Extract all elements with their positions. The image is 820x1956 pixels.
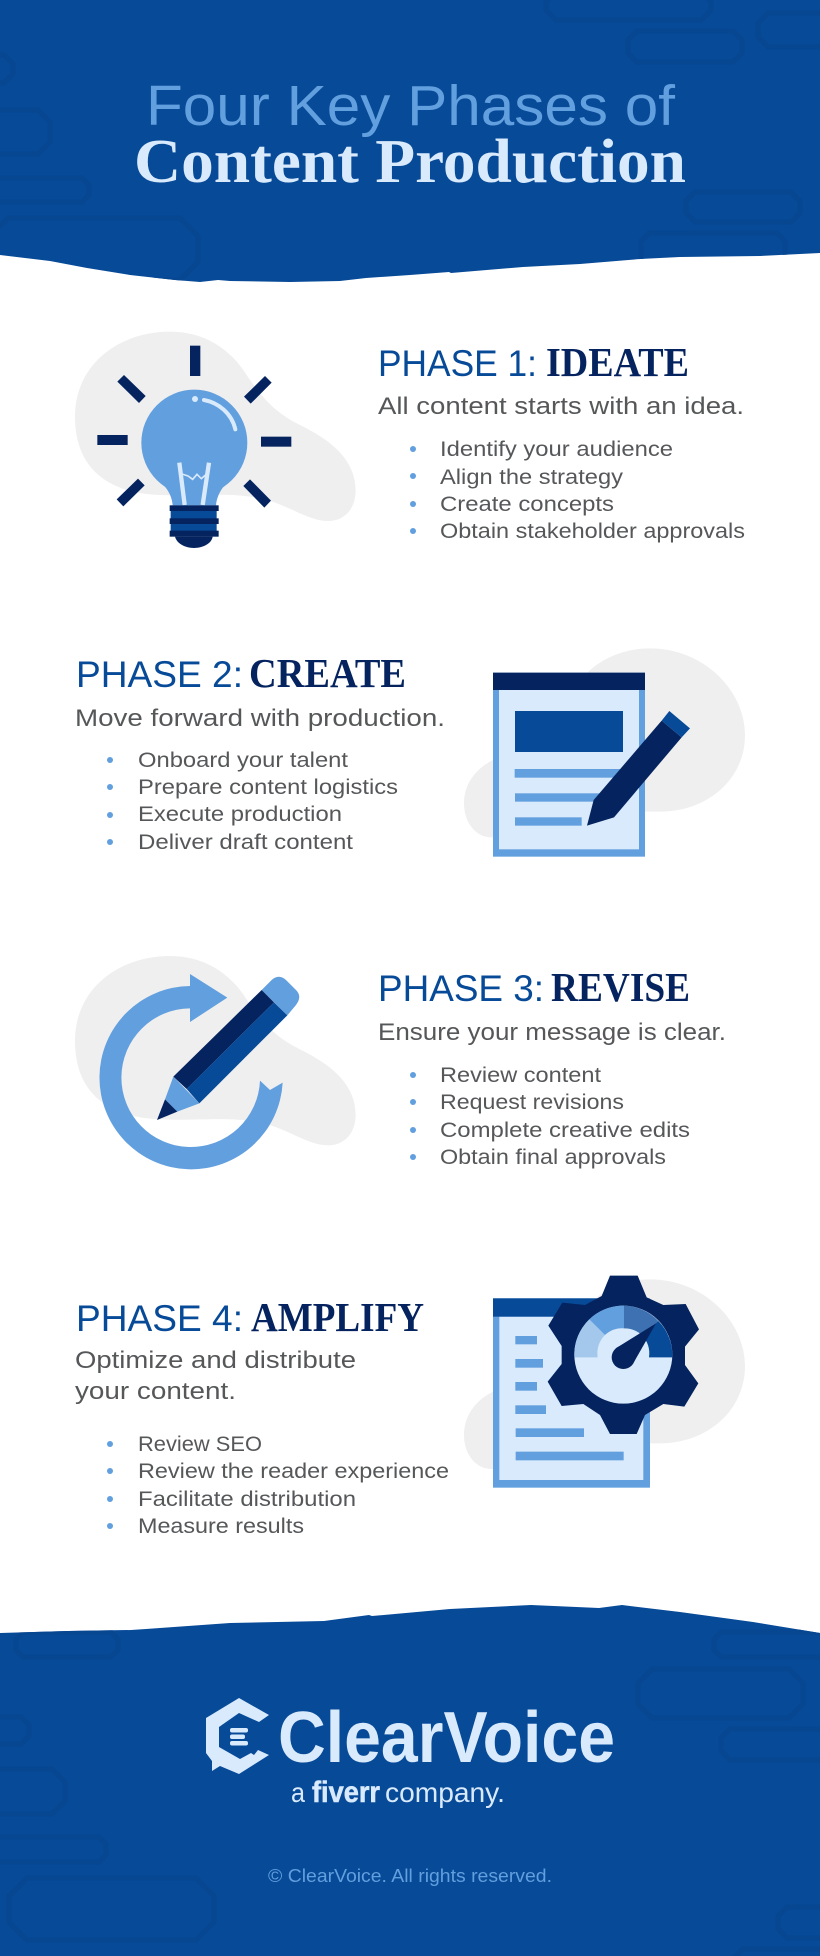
list: phase 3 steps bbox=[410, 1064, 690, 1169]
heading: phase 2 bbox=[76, 650, 406, 696]
list: phase 1 steps: Identify your audience bbox=[440, 438, 673, 461]
list: phase 4 steps: Facilitate distribution bbox=[138, 1488, 356, 1511]
list: phase 3 steps: Review content bbox=[440, 1064, 601, 1087]
heading: phase 1: PHASE 1: bbox=[378, 343, 537, 384]
footer band bbox=[0, 1605, 820, 1956]
list: phase 4 steps: Measure results bbox=[138, 1515, 304, 1538]
text: phase 4 intro: Optimize and distribute bbox=[75, 1347, 356, 1374]
title: Content Production bbox=[134, 128, 686, 196]
list: phase 3 steps: Obtain final approvals bbox=[440, 1146, 666, 1169]
text: phase 4 intro: your content. bbox=[75, 1378, 236, 1405]
heading: phase 1: IDEATE bbox=[546, 339, 689, 385]
icon: light bulb bbox=[75, 332, 356, 548]
heading: phase 4: AMPLIFY bbox=[251, 1294, 424, 1340]
panel: phase 4 amplify bbox=[75, 1276, 745, 1538]
heading: phase 3: REVISE bbox=[551, 964, 690, 1010]
list: phase 4 steps: Review SEO bbox=[138, 1433, 262, 1456]
list: phase 1 steps: Create concepts bbox=[440, 493, 614, 516]
list: phase 1 steps: Obtain stakeholder approvals bbox=[440, 520, 745, 543]
text: phase 3 intro: Ensure your message is clear. bbox=[378, 1019, 726, 1046]
panel: phase 1 ideate bbox=[75, 332, 745, 548]
list: phase 2 steps bbox=[107, 749, 398, 854]
heading: phase 4: PHASE 4: bbox=[76, 1298, 243, 1339]
title: Four Key Phases of bbox=[146, 74, 675, 138]
text: phase 4 intro bbox=[75, 1347, 356, 1405]
list: phase 2 steps: Deliver draft content bbox=[138, 831, 353, 854]
wordmark: ClearVoice bbox=[278, 1698, 615, 1778]
panel: phase 2 create bbox=[75, 648, 745, 857]
list: phase 4 steps bbox=[107, 1433, 449, 1538]
panel: phase 3 revise bbox=[75, 956, 726, 1169]
list: phase 2 steps: Prepare content logistics bbox=[138, 776, 398, 799]
icon: ClearVoice mark bbox=[206, 1698, 269, 1774]
list: phase 1 steps bbox=[410, 438, 745, 543]
tagline bbox=[291, 1776, 505, 1809]
title bbox=[134, 74, 686, 196]
heading: phase 1 bbox=[378, 339, 689, 385]
icon: document and pencil bbox=[464, 648, 745, 857]
list: phase 2 steps: Execute production bbox=[138, 803, 342, 826]
list: phase 3 steps: Request revisions bbox=[440, 1091, 624, 1114]
list: phase 3 steps: Complete creative edits bbox=[440, 1119, 690, 1142]
list: phase 4 steps: Review the reader experience bbox=[138, 1460, 449, 1483]
tagline: fiverr bbox=[312, 1776, 380, 1809]
heading: phase 2: PHASE 2: bbox=[76, 654, 243, 695]
list: phase 2 steps: Onboard your talent bbox=[138, 749, 348, 772]
icon: document with gear gauge bbox=[464, 1276, 745, 1488]
tagline: company. bbox=[385, 1777, 505, 1808]
list: phase 1 steps: Align the strategy bbox=[440, 466, 624, 489]
copyright: © ClearVoice. All rights reserved. bbox=[268, 1866, 552, 1886]
heading: phase 2: CREATE bbox=[249, 650, 406, 696]
heading: phase 3: PHASE 3: bbox=[378, 968, 544, 1009]
header band bbox=[0, 0, 820, 282]
heading: phase 4 bbox=[76, 1294, 424, 1340]
text: phase 1 intro: All content starts with an idea. bbox=[378, 393, 744, 420]
heading: phase 3 bbox=[378, 964, 690, 1010]
text: phase 2 intro: Move forward with production. bbox=[75, 705, 445, 732]
logo: ClearVoice bbox=[206, 1698, 615, 1809]
tagline: a bbox=[291, 1777, 305, 1808]
icon: revision arrow and pencil bbox=[75, 956, 356, 1169]
